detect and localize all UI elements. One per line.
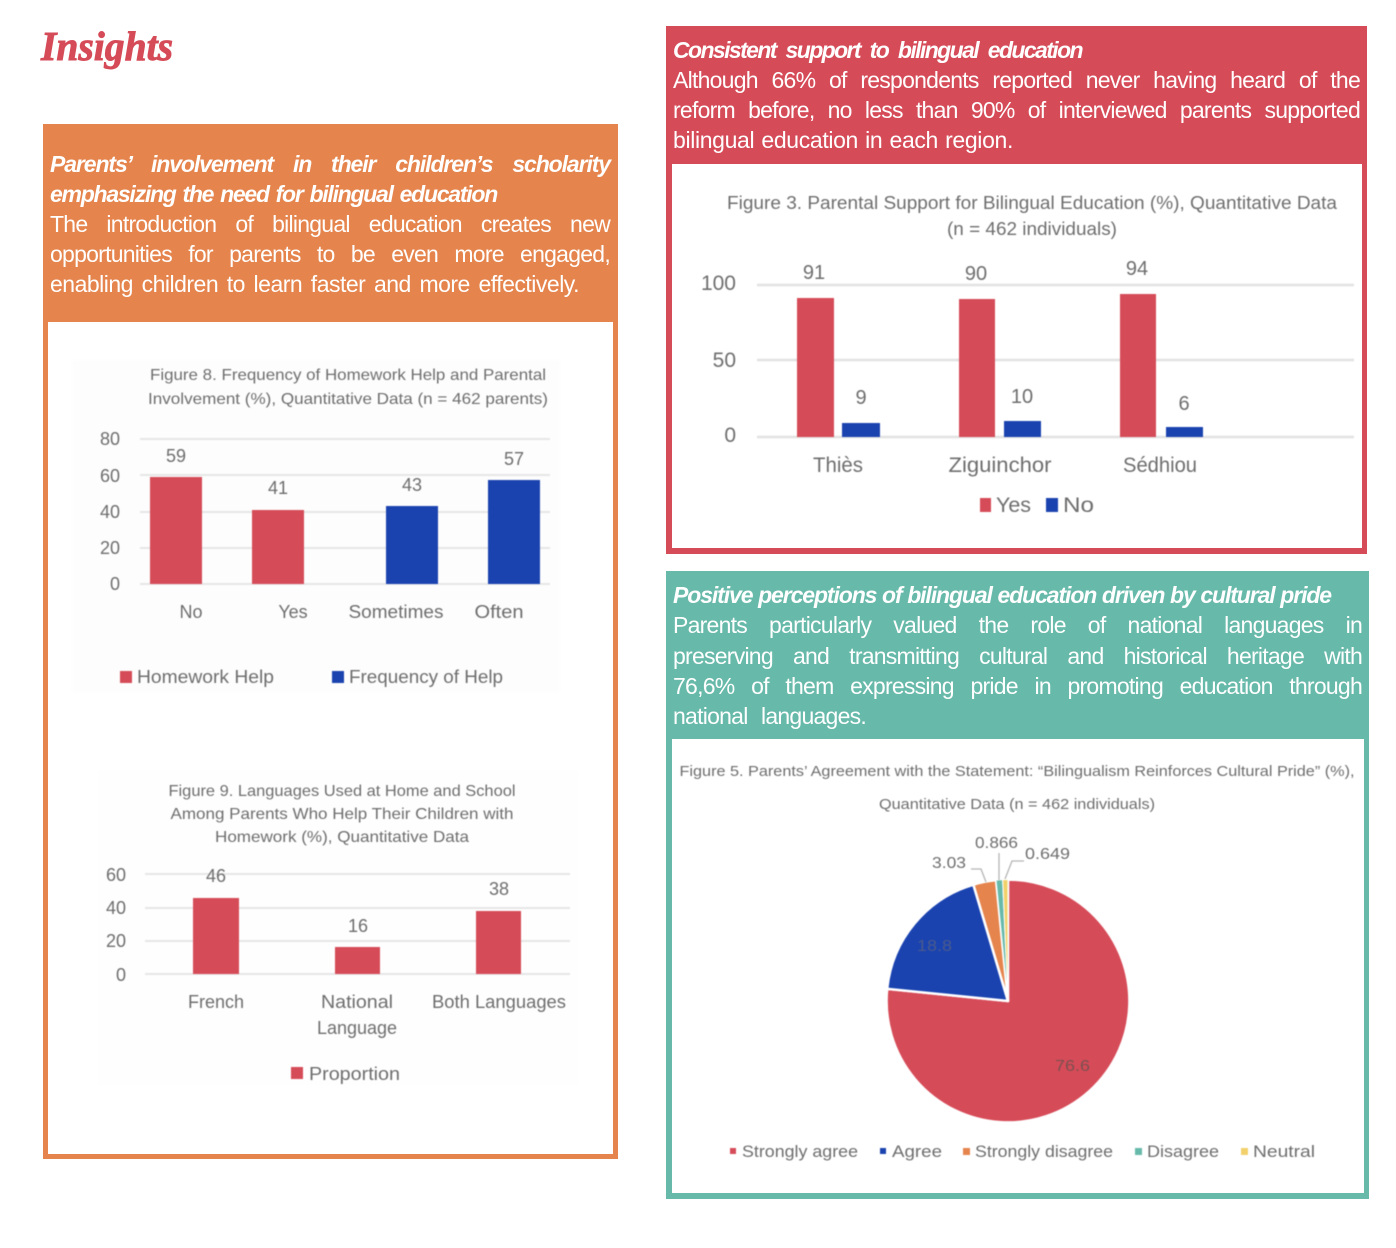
pie labels (917, 835, 1090, 1075)
figure 5 title: Quantitative Data (n = 462 individuals) (879, 796, 1155, 813)
y axis labels: 40 (100, 502, 120, 522)
text block: parents' involvement: opportunities for parents to be even more engaged, (50, 241, 610, 267)
figure 8 title: Figure 8. Frequency of Homework Help and Parental (150, 367, 546, 384)
y axis labels: 20 (106, 931, 126, 951)
title: Insights (40, 23, 173, 69)
category labels: National (321, 992, 393, 1012)
category labels: Ziguinchor (948, 454, 1052, 477)
figure 5 title (680, 763, 1354, 813)
category labels (179, 602, 524, 622)
legend: Frequency of Help (349, 667, 503, 687)
legend: Strongly disagree (975, 1142, 1113, 1161)
text block: consistent support: Although 66% of respondents reported never having heard of the (673, 67, 1360, 93)
value labels (166, 446, 524, 498)
panel: positive perceptions (666, 571, 1369, 1199)
y axis labels: 100 (701, 272, 736, 295)
panel: parents' involvement (43, 124, 618, 1159)
figure 5 title: Figure 5. Parents’ Agreement with the Statement: “Bilingualism Reinforces Cultural Pride” (%), (680, 763, 1354, 780)
y axis labels: 80 (100, 429, 120, 449)
y axis labels (100, 429, 120, 594)
y axis labels: 0 (724, 424, 736, 447)
text block: positive perceptions: Parents particularly valued the role of national languages in (673, 612, 1362, 638)
y axis labels: 60 (100, 466, 120, 486)
text block: consistent support (673, 37, 1360, 153)
value labels: 46 (206, 866, 226, 886)
figure 8 title: Involvement (%), Quantitative Data (n = 462 parents) (148, 391, 548, 408)
text block: parents' involvement: enabling children to learn faster and more effectively. (50, 271, 579, 297)
value labels: 57 (504, 449, 524, 469)
text block: parents' involvement: emphasizing the need for bilingual education (50, 181, 497, 207)
legend (120, 667, 503, 687)
category labels: Language (317, 1018, 397, 1038)
y axis labels: 0 (116, 965, 126, 985)
value labels: 41 (268, 478, 288, 498)
value labels (206, 866, 509, 936)
bars (150, 477, 540, 584)
value labels: 38 (489, 879, 509, 899)
y axis labels (701, 272, 736, 447)
value labels: 91 (803, 262, 825, 284)
pie labels: 0.649 (1025, 846, 1070, 863)
text block: consistent support: Consistent support to bilingual education (673, 37, 1082, 63)
value labels: 9 (855, 387, 867, 409)
category labels: No (179, 602, 203, 622)
chart: figure 8 homework help (72, 360, 560, 692)
legend: Neutral (1253, 1142, 1315, 1161)
y axis labels: 50 (713, 349, 736, 372)
figure 3 title: (n = 462 individuals) (947, 219, 1117, 239)
value labels: 90 (965, 263, 987, 285)
value labels: 43 (402, 475, 422, 495)
category labels: Both Languages (432, 992, 566, 1012)
value labels: 6 (1178, 393, 1190, 415)
text block: positive perceptions: national languages. (673, 703, 866, 729)
text block: parents' involvement: The introduction of bilingual education creates new (50, 211, 610, 237)
text block: positive perceptions: preserving and transmitting cultural and historical heritage with (673, 643, 1362, 669)
category labels: French (188, 992, 244, 1012)
category labels (188, 992, 566, 1038)
legend: Strongly agree (742, 1142, 858, 1161)
chart: figure 3 parental support (701, 193, 1354, 517)
text block: consistent support: reform before, no less than 90% of interviewed parents supported (673, 97, 1360, 123)
bars (193, 898, 521, 974)
legend: Proportion (309, 1064, 400, 1084)
leader lines (971, 853, 1024, 882)
pie labels: 3.03 (932, 855, 966, 872)
bars (797, 294, 1203, 437)
category labels: Thiès (813, 454, 863, 477)
legend: Disagree (1147, 1142, 1219, 1161)
value labels: 59 (166, 446, 186, 466)
chart: figure 5 cultural pride pie (680, 763, 1354, 1161)
chart area: white background (672, 739, 1364, 1193)
category labels: Yes (278, 602, 308, 622)
figure 9 title: Among Parents Who Help Their Children with (170, 806, 514, 823)
legend: Homework Help (137, 667, 274, 687)
legend (730, 1142, 1315, 1161)
figure 3 title: Figure 3. Parental Support for Bilingual Education (%), Quantitative Data (727, 193, 1338, 213)
category labels: Sédhiou (1123, 454, 1197, 477)
chart area: white background (48, 322, 613, 1154)
chart area: white background (672, 164, 1362, 548)
pie labels: 0.866 (975, 835, 1018, 852)
text block: positive perceptions (673, 582, 1362, 729)
figure 9 title: Figure 9. Languages Used at Home and School (168, 783, 516, 800)
pie slices (887, 880, 1129, 1122)
text block: parents' involvement (50, 151, 612, 297)
y axis labels (106, 865, 126, 985)
value labels: 94 (1126, 258, 1148, 280)
figure 8 title (148, 367, 548, 408)
y axis labels: 20 (100, 538, 120, 558)
pie labels: 18.8 (917, 938, 952, 955)
text block: positive perceptions: Positive perceptions of bilingual education driven by cultural pride (673, 582, 1331, 608)
figure 9 title: Homework (%), Quantitative Data (215, 829, 469, 846)
value labels: 16 (348, 916, 368, 936)
legend: Yes (996, 494, 1031, 517)
chart: figure 9 languages (98, 770, 578, 1085)
legend (980, 494, 1094, 517)
text block: consistent support: bilingual education in each region. (673, 127, 1013, 153)
panel: consistent support (666, 26, 1367, 554)
figure 9 title (168, 783, 516, 846)
category labels (813, 454, 1197, 477)
category labels: Often (474, 602, 524, 622)
value labels (803, 258, 1190, 415)
text block: parents' involvement: Parents’ involvement in their children’s scholarity (50, 151, 610, 177)
value labels: 10 (1011, 386, 1033, 408)
legend: Agree (892, 1142, 942, 1161)
figure 3 title (727, 193, 1338, 239)
text block: positive perceptions: 76,6% of them expressing pride in promoting education through (673, 673, 1362, 699)
y axis labels: 40 (106, 898, 126, 918)
y axis labels: 60 (106, 865, 126, 885)
pie labels: 76.6 (1055, 1058, 1090, 1075)
category labels: Sometimes (348, 602, 444, 622)
legend: No (1063, 494, 1094, 517)
y axis labels: 0 (110, 574, 120, 594)
